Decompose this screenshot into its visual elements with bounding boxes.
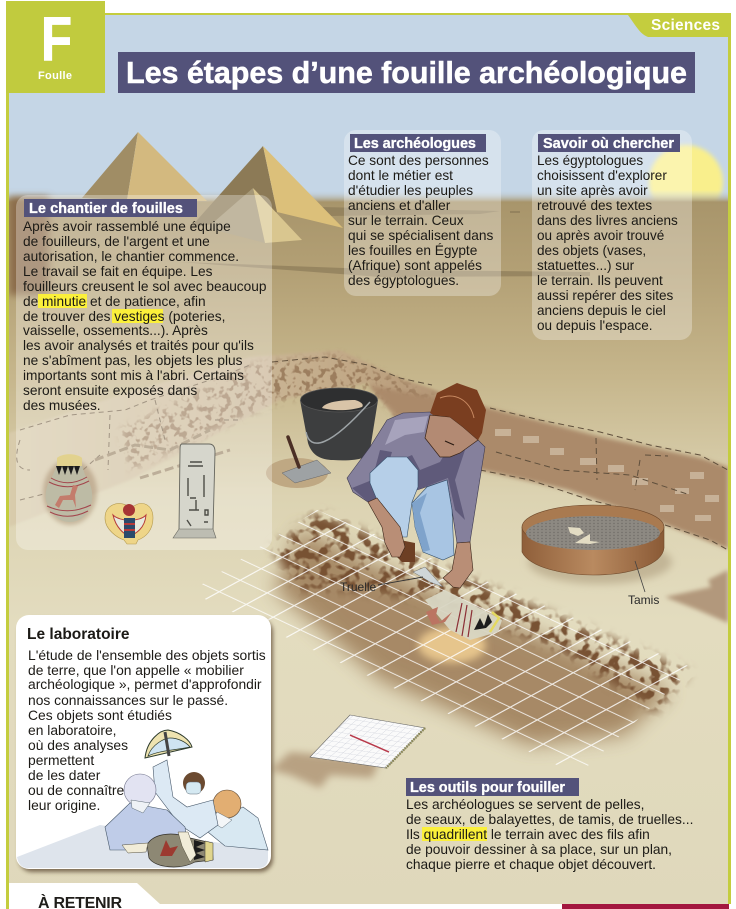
notepad bbox=[310, 715, 425, 768]
pyramid: back left bbox=[82, 132, 207, 201]
sieve mesh bbox=[526, 516, 660, 550]
trowel handle bbox=[288, 437, 299, 467]
notepad sheet bbox=[310, 715, 425, 768]
body text: chaque pierre et chaque objet découvert. bbox=[406, 857, 656, 872]
sun bbox=[646, 142, 726, 201]
body text: retrouvé des textes bbox=[537, 198, 652, 213]
lab table bbox=[17, 825, 268, 868]
tab label: Sciences bbox=[651, 17, 720, 34]
body text: où des analyses bbox=[28, 737, 128, 753]
boot bbox=[393, 540, 415, 562]
body text: de seaux, de balayettes, de tamis, de truelles... bbox=[406, 812, 693, 827]
right leg bbox=[412, 480, 454, 560]
notepad red line bbox=[350, 735, 389, 752]
sieve shards bbox=[568, 527, 600, 544]
trench stones bbox=[495, 429, 719, 521]
heading bar bbox=[350, 134, 486, 152]
body text: choisissent d'explorer bbox=[537, 168, 667, 183]
cap bbox=[124, 774, 156, 806]
body text: de les dater bbox=[28, 767, 101, 783]
grid soil bbox=[190, 510, 693, 775]
horizon haze bbox=[9, 190, 728, 202]
body text: seront ensuite exposés dans bbox=[23, 383, 197, 398]
body text: de minutie et de patience, afin bbox=[23, 294, 206, 309]
soil splotches bbox=[272, 512, 690, 712]
string grid bbox=[190, 510, 693, 775]
scarab body bbox=[124, 518, 135, 538]
panel: savoir où chercher bbox=[532, 130, 692, 340]
body text: aussi repérer des sites bbox=[537, 288, 674, 303]
vase body bbox=[46, 465, 92, 522]
sieve bbox=[522, 505, 672, 584]
icon: cartouche bbox=[173, 444, 216, 538]
body text: Ce sont des personnes bbox=[348, 153, 489, 168]
panel background bbox=[16, 195, 272, 550]
bucket sand bbox=[322, 400, 363, 410]
body text: de trouver des vestiges (poteries, bbox=[23, 309, 225, 324]
highlight: vestiges bbox=[112, 309, 163, 323]
vase teeth bbox=[474, 614, 492, 630]
bucket handle bbox=[306, 402, 370, 443]
hair bbox=[183, 772, 205, 794]
body text: de pouvoir dessiner à sa place, sur un plan, bbox=[406, 842, 672, 857]
lamp glass bbox=[148, 738, 190, 756]
trowel blade bbox=[282, 460, 331, 483]
left glove bbox=[122, 843, 148, 853]
heading: Les archéologues bbox=[354, 136, 476, 152]
body text: sur le terrain. Ceux bbox=[348, 213, 464, 228]
icon: scarab amulet bbox=[105, 503, 153, 544]
sieve shadow bbox=[526, 550, 674, 587]
trowel on ground bbox=[266, 437, 331, 488]
body text: les avoir analysés et traités pour qu'ils bbox=[23, 338, 254, 353]
sieve wall bbox=[522, 527, 664, 575]
highlight: quadrillent bbox=[422, 827, 487, 841]
body text: nos connaissances sur le passé. bbox=[28, 692, 228, 708]
label Truelle bbox=[340, 577, 423, 594]
body text: ne s'abîment pas, les objets les plus bbox=[23, 353, 243, 368]
panel: chantier de fouilles bbox=[16, 195, 272, 550]
label Tamis: Tamis bbox=[628, 593, 659, 607]
shirt highlight bbox=[385, 416, 428, 445]
hair bbox=[430, 383, 486, 440]
body text: un site après avoir bbox=[537, 183, 648, 198]
panel background bbox=[532, 130, 692, 340]
hair highlight bbox=[440, 396, 474, 418]
letter F: F bbox=[41, 5, 72, 74]
body and raised arm bbox=[153, 760, 218, 838]
body text: L'étude de l'ensemble des objets sortis bbox=[28, 647, 266, 663]
heading: Savoir où chercher bbox=[543, 136, 674, 152]
body text: Les archéologues se servent de pelles, bbox=[406, 797, 644, 812]
body text: Les égyptologues bbox=[537, 153, 643, 168]
heading: Le chantier de fouilles bbox=[29, 201, 183, 217]
mask bbox=[131, 800, 150, 813]
pyramid: small front bbox=[207, 188, 302, 243]
title text: Les étapes d’une fouille archéologique bbox=[126, 56, 687, 90]
face and neck bbox=[425, 415, 478, 457]
lamp arm bbox=[165, 732, 169, 756]
technician middle bbox=[153, 760, 218, 838]
body text: d'étudier les peuples bbox=[348, 183, 473, 198]
heading: Les outils pour fouiller bbox=[410, 780, 565, 796]
body text: Ces objets sont étudiés bbox=[28, 707, 172, 723]
excavation trench right bbox=[368, 385, 728, 549]
pyramid: back right bbox=[190, 146, 343, 228]
vase motif bbox=[426, 607, 452, 625]
vase neck bbox=[57, 454, 82, 466]
head bbox=[213, 790, 241, 818]
forearm and hand right bbox=[443, 542, 473, 588]
vase horse bbox=[160, 840, 178, 856]
body bbox=[203, 807, 268, 850]
excavation trench left bbox=[10, 354, 440, 524]
pyramids bbox=[82, 132, 343, 243]
lab lamp bbox=[145, 730, 192, 758]
panel: outils pour fouiller bbox=[406, 778, 697, 872]
heading bar bbox=[24, 199, 197, 217]
body text: de terre, que l'on appelle « mobilier bbox=[28, 662, 244, 678]
vase stripes bbox=[456, 603, 472, 637]
tab shape bbox=[628, 15, 730, 37]
body text: Le travail se fait en équipe. Les bbox=[23, 264, 213, 279]
trench mottling bbox=[120, 355, 440, 470]
face mask bbox=[186, 782, 201, 794]
body text: statuettes...) sur bbox=[537, 258, 635, 273]
shirt shadows bbox=[352, 445, 465, 520]
heading: Le laboratoire bbox=[27, 626, 130, 643]
body text: vaisselle, ossements...). Après bbox=[23, 323, 208, 338]
bucket bbox=[300, 388, 378, 460]
body text: fouilleurs creusent le sol avec beaucoup bbox=[23, 279, 267, 294]
vase horse bbox=[55, 485, 78, 508]
body text: Après avoir rassemblé une équipe bbox=[23, 219, 231, 234]
hand trowel bbox=[413, 567, 443, 587]
vase stripes bbox=[47, 477, 91, 516]
body text: autorisation, le chantier commence. bbox=[23, 249, 239, 264]
sky bbox=[9, 15, 728, 205]
body text: en laboratoire, bbox=[28, 722, 117, 738]
icon: painted vase bbox=[43, 454, 97, 525]
body text: des objets (vases, bbox=[537, 243, 646, 258]
vase yellow band bbox=[490, 612, 499, 632]
desert ground bbox=[9, 202, 728, 904]
dashed outlines under left panel bbox=[17, 365, 250, 500]
body text: qui se spécialisent dans bbox=[348, 228, 493, 243]
body text: importants sont mis à l'abri. Certains bbox=[23, 368, 244, 383]
label Truelle: Truelle bbox=[340, 580, 377, 594]
body bbox=[105, 803, 187, 850]
bucket body bbox=[300, 400, 378, 460]
label Tamis bbox=[628, 561, 659, 607]
soil patch under notepad bbox=[270, 752, 380, 788]
frame right line bbox=[728, 13, 731, 904]
title bar bbox=[118, 52, 695, 93]
yellow sand patch bbox=[418, 627, 486, 663]
body text: ou de connaître bbox=[28, 782, 125, 798]
tab background bbox=[6, 1, 105, 93]
body text: les fouilles en Égypte bbox=[348, 243, 477, 258]
hieroglyphs bbox=[187, 462, 208, 526]
heading bar bbox=[538, 134, 680, 152]
letter tab bbox=[6, 1, 105, 93]
soil patch right bbox=[665, 570, 728, 623]
dune streaks bbox=[180, 207, 590, 277]
half-buried vase bbox=[425, 590, 502, 640]
body text: de fouilleurs, de l'argent et une bbox=[23, 234, 210, 249]
trench dashed outlines bbox=[272, 357, 728, 550]
panel background bbox=[344, 130, 501, 296]
tab shape bbox=[9, 883, 160, 909]
À retenir tab bbox=[9, 883, 160, 909]
scarab inner bbox=[113, 515, 146, 536]
vase neck bbox=[205, 841, 213, 862]
body text: dont le métier est bbox=[348, 168, 453, 183]
body text: ou après avoir trouvé bbox=[537, 228, 664, 243]
technician right bbox=[203, 790, 268, 850]
frame left line bbox=[6, 93, 9, 909]
mask bbox=[212, 812, 232, 828]
panel background bbox=[16, 615, 271, 869]
forearm and hand left bbox=[368, 498, 405, 557]
glove bbox=[178, 832, 196, 862]
body text: anciens et d'aller bbox=[348, 198, 451, 213]
scarab wings bbox=[105, 503, 153, 544]
notepad grid bbox=[310, 715, 425, 768]
body text: le terrain. Ils peuvent bbox=[537, 273, 663, 288]
notepad spiral bbox=[386, 728, 425, 768]
body text: des musées. bbox=[23, 398, 101, 413]
sciences tab bbox=[628, 15, 730, 37]
red bottom bar bbox=[562, 904, 729, 909]
body text: (Afrique) sont appelés bbox=[348, 258, 482, 273]
cartouche base bbox=[173, 529, 216, 538]
leg shading bbox=[412, 493, 430, 552]
shirt bbox=[347, 412, 485, 543]
closed eye bbox=[445, 441, 454, 445]
left leg bbox=[370, 457, 418, 537]
soil base bbox=[275, 530, 670, 745]
sieve rim bbox=[522, 504, 664, 536]
vase teeth bbox=[194, 840, 205, 860]
body text: anciens depuis le ciel bbox=[537, 303, 666, 318]
highlight: minutie bbox=[38, 294, 87, 308]
trowel shadow bbox=[266, 458, 328, 488]
vase shadow bbox=[43, 459, 97, 525]
left dune shadow bbox=[9, 197, 49, 295]
frame top line bbox=[105, 13, 731, 15]
vase black teeth bbox=[56, 466, 83, 475]
lamp dome bbox=[145, 730, 192, 758]
body text: Ils quadrillent le terrain avec des fils afin bbox=[406, 827, 650, 842]
technician left bbox=[105, 774, 187, 850]
vase body bbox=[425, 590, 502, 640]
lab vase bbox=[122, 832, 213, 867]
scarab sun disc bbox=[123, 504, 135, 516]
panel shadow bbox=[19, 619, 273, 872]
title bbox=[118, 52, 695, 93]
panel: laboratoire bbox=[16, 615, 273, 872]
body text: permettent bbox=[28, 752, 94, 768]
body text: leur origine. bbox=[28, 797, 100, 813]
heading bar bbox=[406, 778, 579, 796]
cartouche stone bbox=[179, 444, 215, 530]
body text: ou depuis l'espace. bbox=[537, 318, 653, 333]
body text: dans des livres anciens bbox=[537, 213, 678, 228]
tab word: Foulle bbox=[38, 70, 72, 82]
body text: des égyptologues. bbox=[348, 273, 459, 288]
body text: archéologique », permet d'approfondir bbox=[28, 676, 262, 692]
vase body bbox=[147, 834, 213, 867]
bucket rim bbox=[300, 388, 378, 412]
panel: archéologues bbox=[344, 130, 501, 296]
archaeologist bbox=[347, 383, 486, 588]
